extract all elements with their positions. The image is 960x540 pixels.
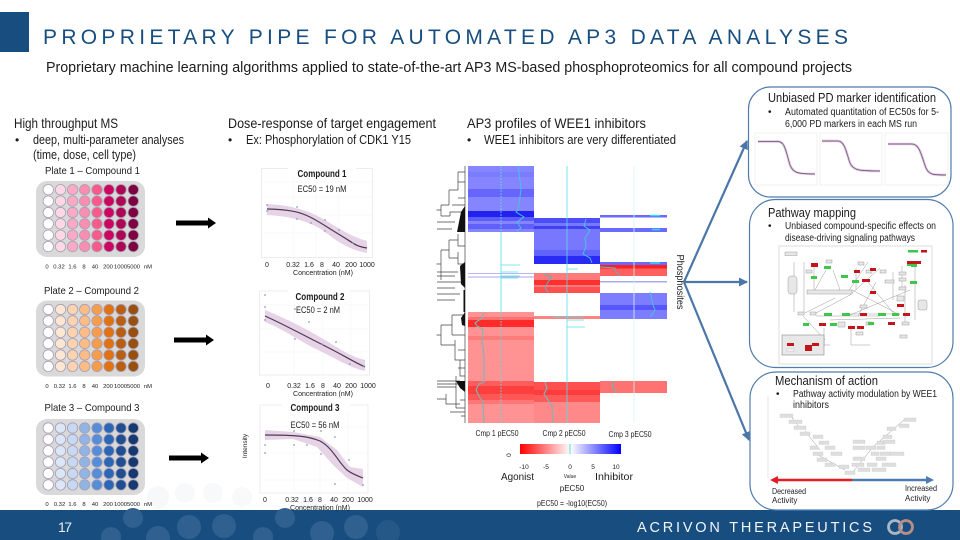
color legend: 10 — [612, 464, 620, 471]
heatmap traces — [475, 166, 660, 423]
plate 3 — [36, 419, 145, 495]
chart: compound 2: Concentration (nM) — [293, 391, 353, 398]
chart: compound 1: Concentration (nM) — [293, 270, 353, 277]
chart: compound 2: 200 — [345, 383, 357, 390]
plate 1 doses: 0 — [45, 264, 49, 270]
color legend: 5 — [591, 464, 595, 471]
increased activity label: Increased — [905, 484, 937, 493]
heatmap column labels: Cmp 2 pEC50 — [542, 428, 586, 438]
column: high throughput MS: (time, dose, cell type) — [33, 148, 136, 162]
color legend: 0 — [506, 453, 513, 457]
plate 2 doses: 1000 — [114, 384, 128, 390]
color legend: Inhibitor — [595, 471, 634, 483]
plate 2 doses: 8 — [82, 384, 86, 390]
column: dose-response: • — [228, 133, 232, 147]
chart: compound 2: EC50 = 2 nM — [296, 305, 340, 316]
column: high throughput MS: • — [15, 133, 19, 147]
chart: compound 2: 0 — [266, 383, 270, 390]
plate 1 doses: 40 — [92, 264, 99, 270]
color legend: -5 — [543, 464, 549, 471]
plate 1 doses: 200 — [103, 264, 114, 270]
chart: compound 2: 40 — [333, 383, 341, 390]
plate 1 doses: 5000 — [127, 264, 141, 270]
column: AP3 profiles: WEE1 inhibitors are very differentiated — [484, 133, 676, 147]
plate 1 — [36, 181, 145, 257]
panel: mechanism of action: • — [776, 389, 780, 400]
column: AP3 profiles: AP3 profiles of WEE1 inhibitors — [467, 115, 646, 131]
column: high throughput MS: deep, multi-parameter analyses — [33, 133, 184, 147]
panel: pathway mapping — [750, 200, 953, 368]
chart: compound 3: 40 — [330, 497, 338, 504]
chart: compound 3: Intensity — [242, 433, 249, 458]
chart: compound 1: 0 — [265, 262, 269, 269]
panel: mechanism of action: inhibitors — [793, 400, 829, 411]
chart: compound 1: 0.32 — [286, 262, 300, 269]
chart: compound 1: Compound 1 — [298, 169, 347, 180]
chart: compound 3: Compound 3 — [290, 403, 340, 414]
panel: PD marker identification: • — [768, 107, 772, 118]
decreased activity label — [772, 487, 806, 505]
plate 3 doses: 1.6 — [68, 502, 77, 508]
mini dose-response charts — [755, 133, 948, 185]
chart: compound 2: 1.6 — [305, 383, 315, 390]
chart: compound 1: 1000 — [359, 262, 375, 269]
chart: compound 2: Compound 2 — [296, 292, 345, 303]
chart: compound 3: 0.32 — [285, 497, 299, 504]
plate 2 doses: nM — [144, 384, 152, 390]
color legend: Agonist — [501, 471, 534, 483]
decreased activity label: Decreased — [772, 487, 806, 496]
plate 3 doses: 40 — [92, 502, 99, 508]
chart: compound 3: 0 — [263, 497, 267, 504]
increased activity label: Activity — [905, 494, 930, 503]
chart: compound 3: 200 — [342, 497, 354, 504]
decreased activity label: Activity — [772, 496, 797, 505]
arrow 3 — [169, 452, 209, 464]
title: PROPRIETARY PIPE FOR AUTOMATED AP3 DATA ANALYSES — [43, 26, 848, 49]
subtitle: Proprietary machine learning algorithms applied to state-of-the-art AP3 MS-based phosphoproteomics for all compound projects — [46, 59, 852, 76]
plate 2 doses: 200 — [103, 384, 114, 390]
footer band — [0, 483, 960, 540]
heatmap column labels: Cmp 3 pEC50 — [608, 429, 652, 439]
arrows to panels — [684, 141, 749, 440]
column: high throughput MS: High throughput MS — [14, 115, 118, 131]
plate 2 doses: 0 — [45, 384, 49, 390]
heatmap column 1 — [468, 166, 534, 423]
chart: compound 1: 200 — [345, 262, 357, 269]
column: dose-response — [228, 115, 436, 147]
panel: pathway mapping: Pathway mapping — [768, 206, 856, 220]
color legend: 0 — [568, 464, 572, 471]
color legend — [501, 444, 634, 508]
color legend: -10 — [519, 464, 529, 471]
pathway legend — [782, 335, 824, 355]
heatmap column labels: Cmp 1 pEC50 — [476, 428, 519, 438]
plate 2 label: Plate 2 – Compound 2 — [44, 285, 139, 297]
plate 1 doses — [45, 264, 152, 270]
chart: compound 3 — [242, 403, 373, 512]
increased activity arrow — [852, 476, 934, 484]
header square — [0, 12, 29, 52]
chart: compound 1 — [262, 165, 375, 277]
plate 1 label: Plate 1 – Compound 1 — [45, 165, 140, 177]
plate 2 doses: 5000 — [127, 384, 141, 390]
company name: ACRIVON THERAPEUTICS — [637, 520, 872, 536]
column: high throughput MS — [14, 115, 184, 162]
chart: compound 1: 40 — [332, 262, 340, 269]
increased activity label — [905, 484, 937, 503]
dendrogram dense leaves — [456, 206, 465, 392]
chart: compound 3: EC50 = 56 nM — [290, 420, 340, 431]
plate 3 doses: 200 — [103, 502, 114, 508]
plate 1 doses: 0.32 — [53, 264, 65, 270]
arrow 1 — [176, 218, 216, 228]
color legend: Value — [564, 474, 576, 480]
plate 2 doses — [45, 384, 152, 390]
chart: compound 1: 8 — [320, 262, 324, 269]
plate 1 doses: 1.6 — [68, 264, 77, 270]
plate 3 doses: 5000 — [127, 502, 141, 508]
dendrogram — [436, 166, 465, 423]
pathway diagram — [779, 246, 932, 364]
plate 3 doses: 0.32 — [54, 502, 65, 508]
chart: compound 2 — [260, 289, 376, 398]
panel: mechanism of action: Pathway activity modulation by WEE1 — [793, 389, 937, 400]
chart: compound 1: 1.6 — [304, 262, 314, 269]
page number: 17 — [58, 519, 72, 535]
arrow 2 — [174, 334, 214, 346]
panel: PD marker identification: Automated quantitation of EC50s for 5- — [785, 107, 939, 118]
chart: compound 2: 1000 — [360, 383, 376, 390]
panel: PD marker identification — [748, 87, 951, 197]
decreased activity arrow — [770, 476, 852, 484]
heatmap — [468, 166, 667, 423]
heatmap column 3 — [600, 215, 667, 393]
plate 3 doses: 8 — [82, 502, 86, 508]
chart: compound 2: 0.32 — [287, 383, 301, 390]
column: dose-response: Dose-response of target engagement — [228, 115, 436, 131]
panel: pathway mapping: • — [768, 221, 772, 232]
phosphosites label: Phosphosites — [674, 254, 686, 310]
panel: pathway mapping: Unbiased compound-specific effects on — [785, 221, 936, 232]
panel: pathway mapping: disease-driving signaling pathways — [785, 233, 915, 244]
volcano plot — [768, 396, 916, 478]
panel: PD marker identification: 6,000 PD markers in each MS run — [785, 119, 917, 130]
plate 2 doses: 0.32 — [54, 384, 65, 390]
plate 3 doses: 1000 — [114, 502, 128, 508]
plate 2 doses: 1.6 — [68, 384, 77, 390]
color legend: pEC50 — [560, 484, 585, 493]
panel: mechanism of action: Mechanism of action — [775, 374, 878, 388]
plate 1 doses: 8 — [82, 264, 86, 270]
plate 1 doses: nM — [144, 264, 152, 270]
color legend: pEC50 = -log10(EC50) — [537, 499, 607, 508]
plate 3 doses: 0 — [45, 502, 49, 508]
plate 2 doses: 40 — [92, 384, 99, 390]
panel: PD marker identification: Unbiased PD marker identification — [768, 91, 936, 105]
chart: compound 3: 1000 — [357, 497, 373, 504]
chart: compound 3: 8 — [318, 497, 322, 504]
plate 1 doses: 1000 — [114, 264, 128, 270]
chart: compound 2: 8 — [321, 383, 325, 390]
plate 2 — [36, 300, 145, 376]
chart: compound 1: EC50 = 19 nM — [298, 184, 347, 195]
chart: compound 3: 1.6 — [303, 497, 313, 504]
heatmap column 2 — [534, 218, 600, 423]
plate 3 doses: nM — [144, 502, 152, 508]
plate 3 doses — [45, 502, 152, 508]
column: AP3 profiles — [467, 115, 676, 147]
chart: compound 3: Concentration (nM) — [290, 505, 350, 512]
plate 3 label: Plate 3 – Compound 3 — [44, 402, 140, 414]
panel: mechanism of action — [750, 372, 953, 510]
heatmap column labels — [476, 428, 652, 439]
icon: company logo — [888, 520, 912, 534]
column: AP3 profiles: • — [467, 133, 471, 147]
column: dose-response: Ex: Phosphorylation of CDK1 Y15 — [246, 133, 411, 147]
